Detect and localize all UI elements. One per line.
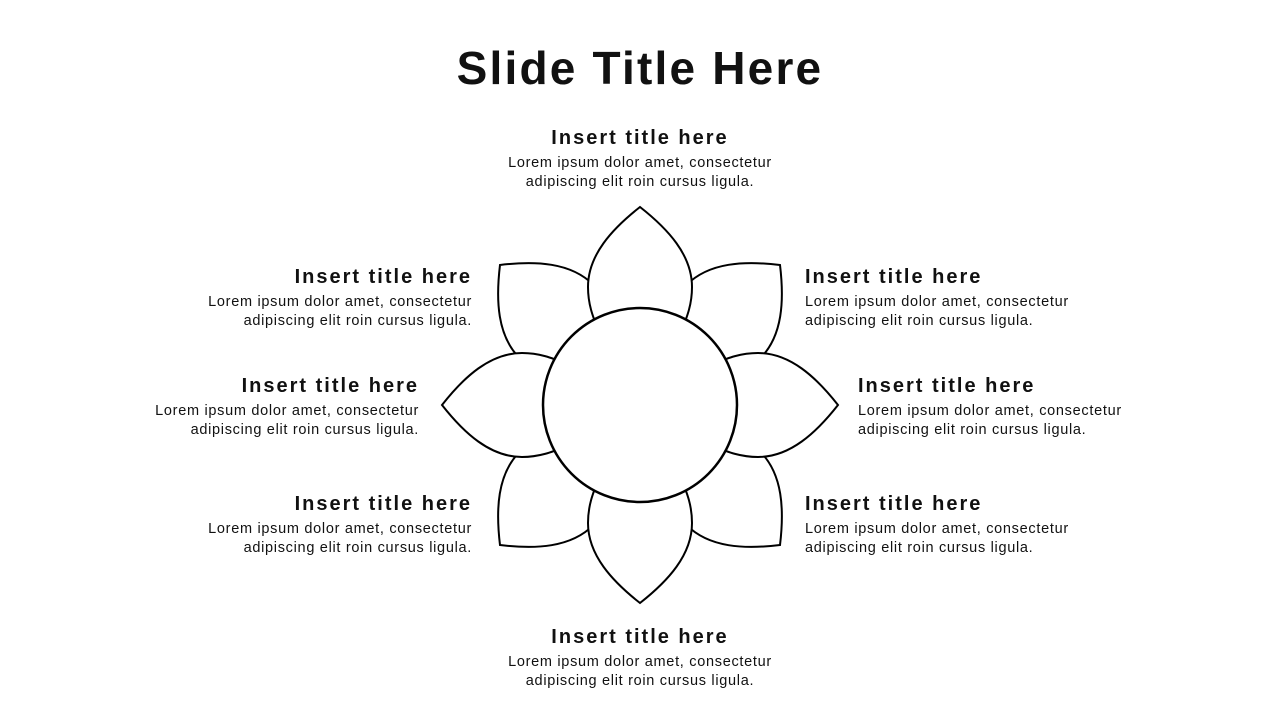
text: upper left: Insert title here xyxy=(295,266,472,288)
text: left: Insert title here xyxy=(242,375,419,397)
text: lower left: Insert title here xyxy=(295,493,472,515)
text: upper left xyxy=(208,266,472,329)
text: upper right xyxy=(805,266,1069,329)
text: top xyxy=(508,127,772,190)
text: upper left: adipiscing elit roin cursus ligula. xyxy=(244,313,472,329)
text: bottom: Insert title here xyxy=(551,626,729,648)
text: top: Lorem ipsum dolor amet, consectetur xyxy=(508,155,772,171)
text: right: Lorem ipsum dolor amet, consectetur xyxy=(858,403,1122,419)
text: upper left: Lorem ipsum dolor amet, consectetur xyxy=(208,294,472,310)
text: bottom: Lorem ipsum dolor amet, consectetur xyxy=(508,654,772,670)
text: upper right: Lorem ipsum dolor amet, consectetur xyxy=(805,294,1069,310)
diagonal petals xyxy=(463,228,817,582)
title: Slide Title Here xyxy=(457,42,823,94)
text: upper right: Insert title here xyxy=(805,266,982,288)
text: right: adipiscing elit roin cursus ligula. xyxy=(858,422,1086,438)
text: bottom xyxy=(508,626,772,689)
text: left: Lorem ipsum dolor amet, consectetur xyxy=(155,403,419,419)
text: left: adipiscing elit roin cursus ligula. xyxy=(191,422,419,438)
text: right: Insert title here xyxy=(858,375,1035,397)
text: lower right xyxy=(805,493,1069,556)
text: top: adipiscing elit roin cursus ligula. xyxy=(526,174,754,190)
text: lower right: Lorem ipsum dolor amet, consectetur xyxy=(805,521,1069,537)
text: right xyxy=(858,375,1122,438)
text: left xyxy=(155,375,419,438)
text: lower right: Insert title here xyxy=(805,493,982,515)
text: upper right: adipiscing elit roin cursus ligula. xyxy=(805,313,1033,329)
text: top: Insert title here xyxy=(551,127,729,149)
text: lower left: Lorem ipsum dolor amet, consectetur xyxy=(208,521,472,537)
text: bottom: adipiscing elit roin cursus ligula. xyxy=(526,673,754,689)
text: lower right: adipiscing elit roin cursus ligula. xyxy=(805,540,1033,556)
center circle xyxy=(543,308,737,502)
text: lower left: adipiscing elit roin cursus ligula. xyxy=(244,540,472,556)
text: lower left xyxy=(208,493,472,556)
cardinal petals xyxy=(442,207,838,603)
